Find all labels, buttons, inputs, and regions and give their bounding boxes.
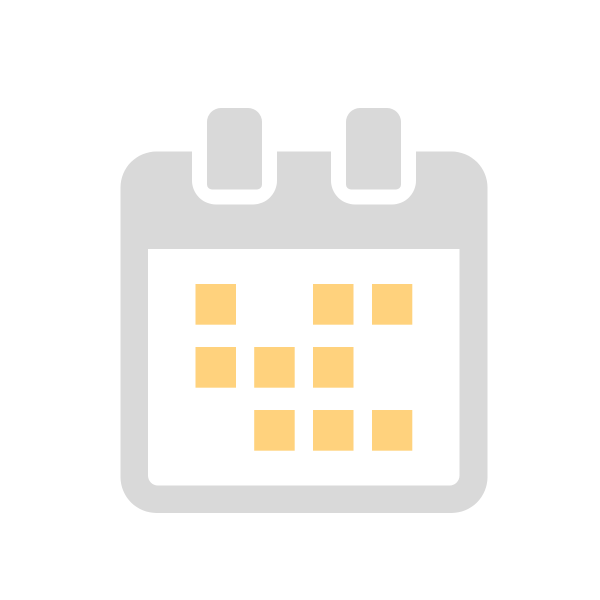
left binding ring — [207, 108, 262, 190]
calendar body with binding notches and date window — [120, 152, 488, 513]
marked calendar days — [196, 284, 412, 451]
right binding ring — [346, 108, 401, 190]
icon: calendar — [120, 108, 488, 513]
